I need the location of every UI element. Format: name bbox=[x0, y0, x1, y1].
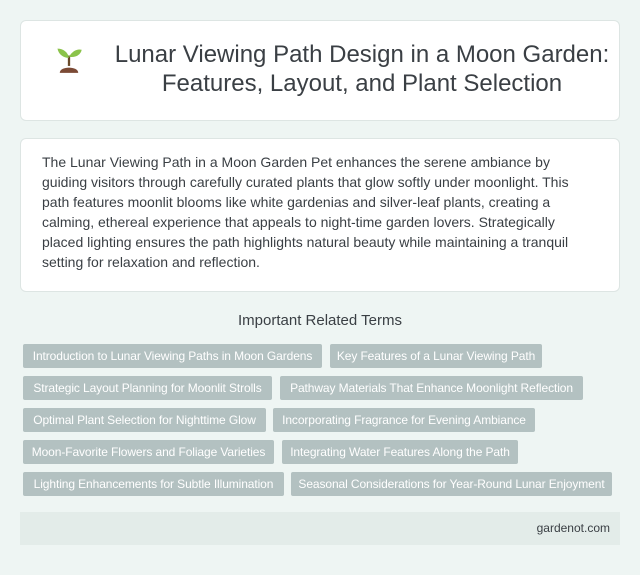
footer bbox=[20, 512, 620, 545]
title: Lunar Viewing Path Design in a Moon Garden: Features, Layout, and Plant Selection bbox=[115, 41, 609, 97]
tags: Incorporating Fragrance for Evening Ambiance bbox=[282, 413, 526, 427]
tags: Optimal Plant Selection for Nighttime Glow bbox=[33, 413, 256, 427]
icon: seedling bbox=[58, 48, 82, 73]
description card bbox=[20, 138, 620, 292]
tags: Seasonal Considerations for Year-Round Lunar Enjoyment bbox=[298, 477, 605, 491]
title card bbox=[20, 20, 620, 121]
description text: The Lunar Viewing Path in a Moon Garden Pet enhances the serene ambiance by guiding visitors through carefully curated plants that glow softly under moonlight. This path features moonlit blooms like white gardenias and silver-leaf plants, creating a calming, ethereal experience that appeals to night-time garden lovers. Strategically placed lighting ensures the path highlights natural beauty while maintaining a tranquil setting for relaxation and reflection. bbox=[42, 154, 569, 270]
tags: Pathway Materials That Enhance Moonlight Reflection bbox=[290, 381, 573, 395]
footer text: gardenot.com bbox=[537, 521, 610, 535]
tags: Integrating Water Features Along the Path bbox=[290, 445, 510, 459]
tags: Key Features of a Lunar Viewing Path bbox=[337, 349, 535, 363]
tags: Moon-Favorite Flowers and Foliage Varieties bbox=[32, 445, 265, 459]
tags: Lighting Enhancements for Subtle Illumination bbox=[34, 477, 273, 491]
tags: Strategic Layout Planning for Moonlit Strolls bbox=[33, 381, 262, 395]
section heading: Important Related Terms bbox=[238, 312, 402, 329]
tags: Introduction to Lunar Viewing Paths in Moon Gardens bbox=[33, 349, 312, 363]
